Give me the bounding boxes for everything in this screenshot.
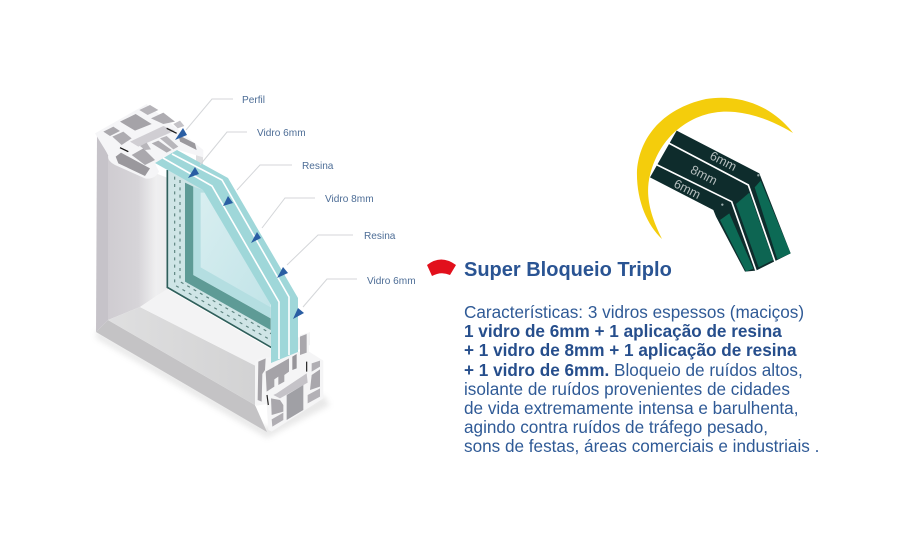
frame shadow bbox=[96, 330, 330, 438]
bottom profile section bbox=[255, 333, 323, 432]
description text: de vida extremamente intensa e barulhenta, bbox=[464, 398, 798, 418]
top profile section bbox=[95, 104, 203, 179]
icon: red fan bbox=[427, 260, 456, 276]
label: Vidro 8mm: Vidro 8mm bbox=[325, 194, 374, 205]
label: Vidro 6mm top: Vidro 6mm bbox=[257, 128, 306, 139]
label: Resina bottom: Resina bbox=[364, 231, 396, 242]
leader lines bbox=[186, 99, 357, 307]
glass detail: three layers bbox=[650, 131, 791, 272]
icon: yellow crescent bbox=[637, 98, 793, 239]
triple glass layers bbox=[155, 150, 298, 363]
label: Perfil: Perfil bbox=[242, 95, 265, 106]
leader arrowheads bbox=[175, 128, 304, 319]
description text: sons de festas, áreas comerciais e industriais . bbox=[464, 436, 819, 456]
glass detail: three layers: 8mm bbox=[688, 163, 720, 188]
description text: isolante de ruídos provenientes de cidades bbox=[464, 379, 790, 399]
glass detail: three layers: 6mm bbox=[671, 177, 703, 202]
description text: Características: 3 vidros espessos (maciços) bbox=[464, 302, 804, 322]
description text: + 1 vidro de 8mm + 1 aplicação de resina bbox=[464, 340, 797, 360]
description text: + 1 vidro de 6mm. Bloqueio de ruídos altos, bbox=[464, 360, 803, 380]
heading: Super Bloqueio Triplo bbox=[464, 259, 672, 281]
glass detail: three layers: 6mm bbox=[707, 149, 739, 174]
insulating glass spacer and pane bbox=[167, 170, 272, 348]
description text: agindo contra ruídos de tráfego pesado, bbox=[464, 417, 768, 437]
label: Vidro 6mm bottom: Vidro 6mm bbox=[367, 276, 416, 287]
description text: 1 vidro de 6mm + 1 aplicação de resina bbox=[464, 321, 782, 341]
label: Resina top: Resina bbox=[302, 161, 334, 172]
window frame body bbox=[96, 133, 310, 432]
description text bbox=[464, 302, 819, 456]
